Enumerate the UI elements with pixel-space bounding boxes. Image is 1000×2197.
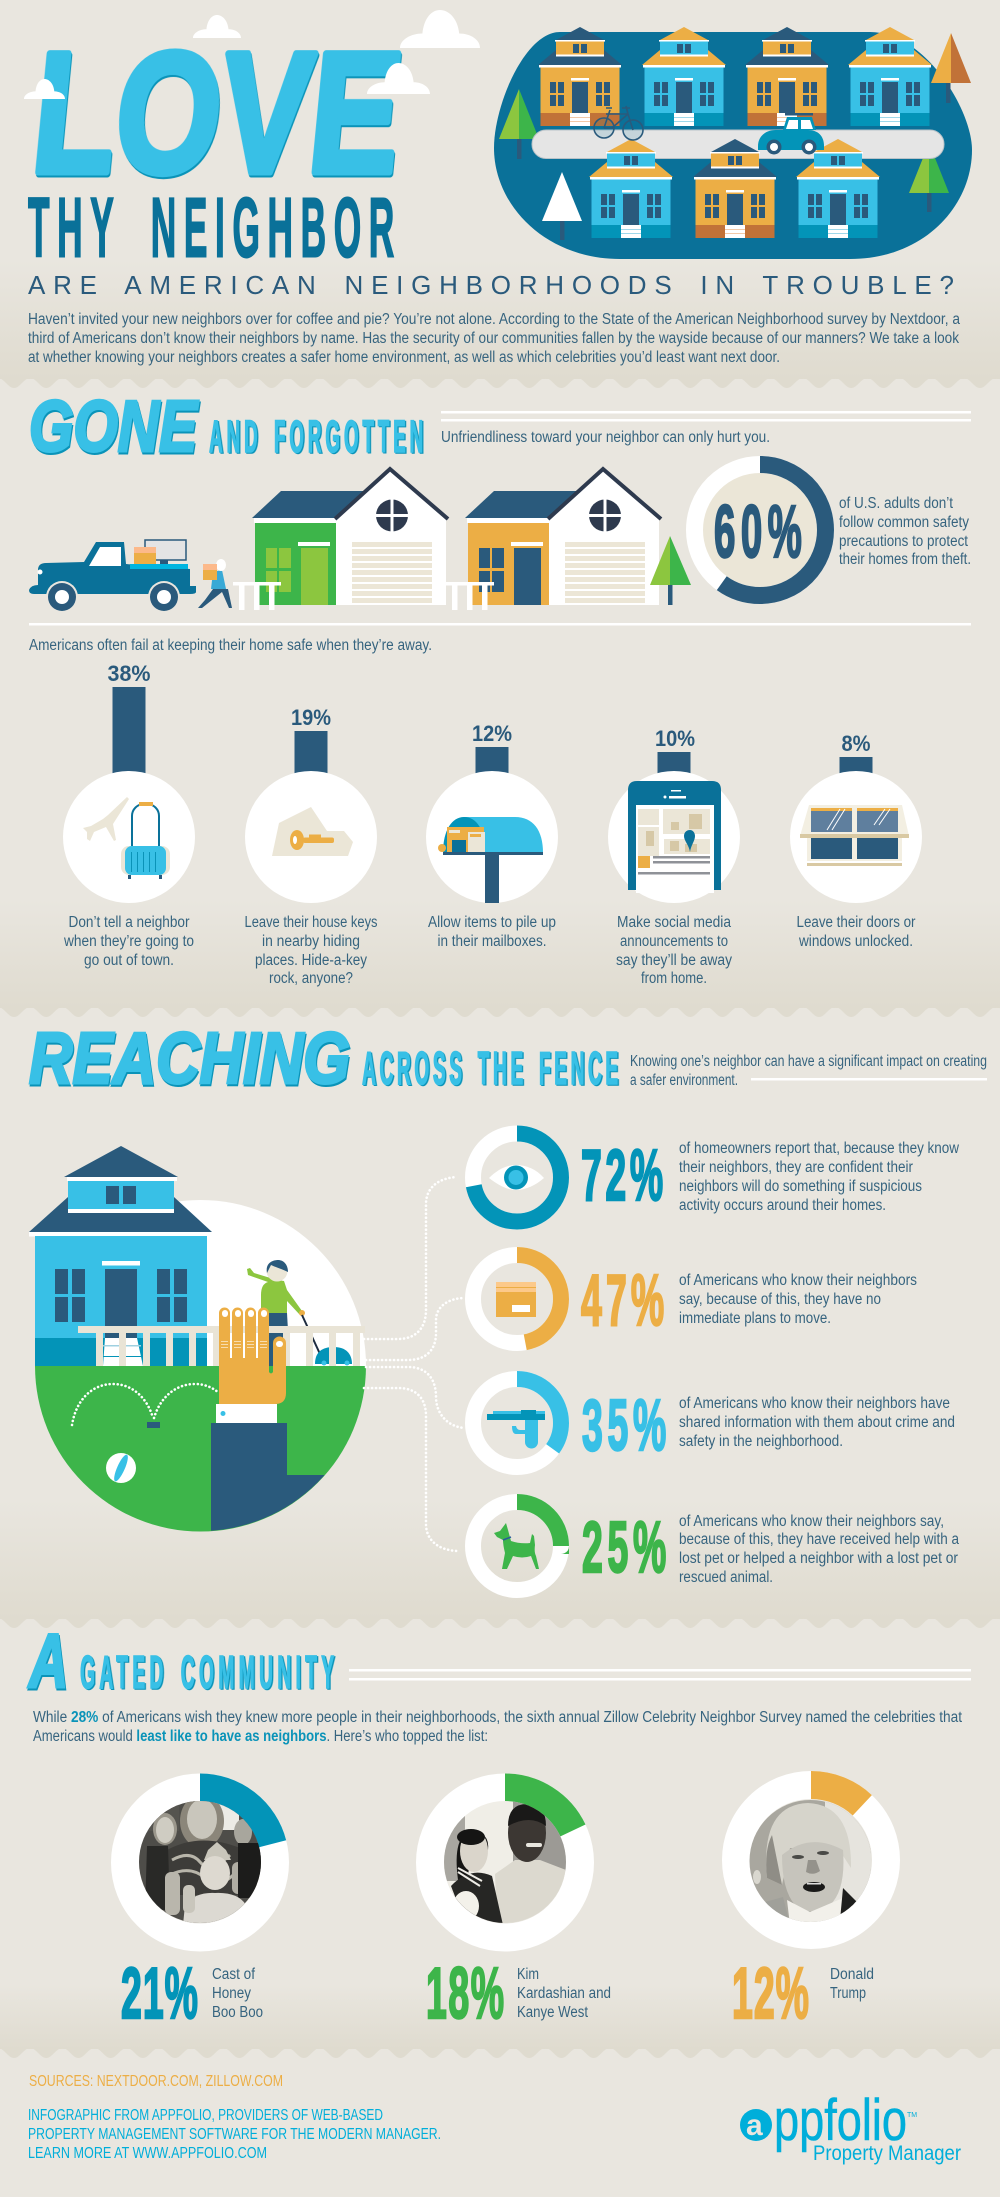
caption: when they’re going to (63, 933, 194, 950)
credits: LEARN MORE AT WWW.APPFOLIO.COM (28, 2145, 267, 2162)
intro text: at whether knowing your neighbors creates a safer home environment, as well as which celebrities you’d least want next door. (28, 349, 780, 366)
column: 10% (608, 726, 740, 987)
stat: 25%: because of this, they have received help with a (679, 1531, 959, 1548)
sources: SOURCES: NEXTDOOR.COM, ZILLOW.COM (29, 2073, 283, 2090)
column: 8% (790, 731, 922, 950)
caption (796, 914, 916, 950)
icon: window (800, 805, 909, 866)
sprinkler (72, 1384, 219, 1428)
logo: appfolio: ppfolio (774, 2088, 907, 2153)
column: 12% (426, 721, 558, 950)
stat: 47%: 47% (581, 1261, 664, 1341)
stat: 47%: immediate plans to move. (679, 1310, 831, 1327)
caption (244, 914, 378, 987)
celebrity: kim and kanye: 18% (426, 1954, 504, 2034)
donut chart: 60%: 60% (714, 492, 802, 573)
stat: 25%: rescued animal. (679, 1569, 773, 1586)
credits: INFOGRAPHIC FROM APPFOLIO, PROVIDERS OF WEB-BASED (28, 2107, 383, 2124)
caption (616, 914, 732, 987)
stat: 72%: activity occurs around their homes. (679, 1197, 886, 1214)
panel: gone and forgotten (29, 387, 971, 987)
caption: in nearby hiding (262, 933, 360, 950)
column: 10%: 10% (655, 726, 695, 751)
icon: dog (494, 1523, 539, 1569)
icon: eye (489, 1165, 544, 1190)
stat: 72%: of homeowners report that, because they know (679, 1140, 960, 1157)
photo placeholder (139, 1794, 262, 1925)
icon: person carrying box (198, 559, 232, 608)
column: 19% (244, 705, 378, 987)
heading: REACHING (29, 1019, 350, 1099)
logo: appfolio (740, 2088, 961, 2165)
icon: rock with key (272, 807, 353, 856)
stat: 35%: shared information with them about crime and (679, 1414, 955, 1431)
neighborhood illustration (494, 27, 972, 259)
heading: GATED COMMUNITY (80, 1648, 334, 1698)
panel: a gated community (28, 1619, 971, 2034)
celebrity: donald trump: Trump (830, 1985, 866, 2002)
column: 12%: 12% (472, 721, 512, 746)
neighbor mowing lawn (247, 1260, 352, 1366)
stat: 35%: of Americans who know their neighbors have (679, 1395, 950, 1412)
panel: header (24, 10, 972, 366)
caption (63, 914, 194, 969)
icon: box (496, 1282, 536, 1317)
stat: 72%: their neighbors, they are confident their (679, 1159, 913, 1176)
icon: plane and luggage (83, 797, 170, 879)
title: Love: LOVE (25, 16, 410, 209)
caption: Allow items to pile up (428, 914, 556, 931)
caption: Don’t tell a neighbor (68, 914, 190, 931)
caption: Make social media (617, 914, 731, 931)
stat: 72%: 72% (581, 1136, 663, 1216)
subheading text: Unfriendliness toward your neighbor can only hurt you. (441, 429, 770, 446)
intro text (33, 1709, 963, 1745)
road (532, 130, 944, 158)
hand (216, 1308, 286, 1423)
stat: 47%: of Americans who know their neighbors (679, 1272, 917, 1289)
subheading text: a safer environment. (630, 1072, 738, 1089)
celebrity: honey boo boo: 21% (121, 1954, 198, 2034)
icon: trees (499, 33, 971, 240)
caption: in their mailboxes. (438, 933, 546, 950)
icon: water gun (487, 1410, 545, 1448)
celebrity: honey boo boo: Boo Boo (212, 2004, 263, 2021)
caption: from home. (641, 970, 707, 987)
subheading text (630, 1053, 987, 1089)
icon: pickup truck (29, 540, 196, 613)
stat: 25%: 25% (582, 1508, 666, 1588)
caption: go out of town. (84, 952, 174, 969)
60% description: precautions to protect (839, 533, 969, 550)
caption: say they’ll be away (616, 952, 732, 969)
stat: 47% (473, 1255, 917, 1343)
donut chart: 60% (694, 464, 826, 596)
heading (29, 387, 423, 467)
logo: appfolio: a (746, 2109, 763, 2142)
dotted connectors (364, 1177, 465, 1551)
stat: 25% (473, 1502, 959, 1590)
icon: mailbox (438, 817, 543, 903)
icon: tree (650, 536, 691, 605)
stat: 72% (473, 1134, 960, 1222)
title: thy neighbor: THY NEIGHBOR (28, 181, 394, 275)
heading: AND FORGOTTEN (209, 413, 423, 462)
stat: 25%: lost pet or helped a neighbor with a lost pet or (679, 1550, 958, 1567)
stat: 47%: say, because of this, they have no (679, 1291, 881, 1308)
column: 38%: 38% (108, 661, 150, 686)
stat: 35%: 35% (582, 1386, 666, 1466)
celebrity: honey boo boo (121, 1788, 275, 2034)
photo placeholder (749, 1800, 872, 1925)
caption: Leave their house keys (244, 914, 378, 931)
celebrity: donald trump: Donald (830, 1966, 874, 1983)
heading (28, 1619, 334, 1704)
icon: bicycle (594, 106, 643, 140)
panel: reaching across the fence (29, 1019, 987, 1590)
sleeve (211, 1423, 324, 1531)
heading: ACROSS THE FENCE (362, 1044, 618, 1094)
60% description (839, 495, 971, 568)
stat: 72%: neighbors will do something if suspicious (679, 1178, 922, 1195)
celebrity: kim and kanye (426, 1788, 611, 2034)
house: green (233, 469, 448, 610)
caption: windows unlocked. (798, 933, 913, 950)
stat: 25%: of Americans who know their neighbors say, (679, 1513, 944, 1530)
intro text (28, 311, 960, 366)
heading: GONE (29, 387, 199, 467)
celebrity: kim and kanye: Kanye West (517, 2004, 589, 2021)
60% description: follow common safety (839, 514, 969, 531)
caption: rock, anyone? (269, 970, 353, 987)
celebrity: kim and kanye: Kardashian and (517, 1985, 611, 2002)
celebrity: kim and kanye: Kim (517, 1966, 539, 1983)
heading (29, 1019, 618, 1099)
footer (28, 2073, 961, 2165)
houses top row (538, 27, 932, 126)
text: intro to bars: Americans often fail at keeping their home safe when they’re away. (29, 637, 432, 654)
60% description: of U.S. adults don’t (839, 495, 954, 512)
houses bottom row (589, 139, 880, 238)
column: 38% (63, 661, 195, 969)
intro text: Americans would least like to have as neighbors. Here’s who topped the list: (33, 1728, 488, 1745)
column: 8%: 8% (842, 731, 870, 756)
caption (428, 914, 556, 950)
logo: appfolio: Property Manager (813, 2142, 961, 2165)
icon: phone with map (628, 781, 721, 893)
celebrity: honey boo boo: Cast of (212, 1966, 256, 1983)
icon: ball (106, 1453, 136, 1483)
column: 19%: 19% (291, 705, 331, 730)
60% description: their homes from theft. (839, 551, 971, 568)
credits (28, 2107, 441, 2162)
icon: car (758, 113, 824, 154)
celebrity: donald trump: 12% (732, 1954, 809, 2034)
house (29, 1146, 212, 1366)
celebrity: donald trump (732, 1785, 886, 2034)
caption: places. Hide-a-key (255, 952, 367, 969)
house: orange (446, 469, 661, 610)
caption: announcements to (620, 933, 728, 950)
stat: 35% (473, 1379, 955, 1467)
credits: PROPERTY MANAGEMENT SOFTWARE FOR THE MODERN MANAGER. (28, 2126, 441, 2143)
caption: Leave their doors or (796, 914, 916, 931)
logo: appfolio: TM (907, 2112, 917, 2119)
stat: 35%: safety in the neighborhood. (679, 1433, 843, 1450)
illustration: house and waving hand (29, 1146, 366, 1532)
subtitle: ARE AMERICAN NEIGHBORHOODS IN TROUBLE? (28, 270, 954, 300)
photo placeholder (444, 1801, 567, 1925)
icon: clouds (24, 10, 480, 99)
celebrity: honey boo boo: Honey (212, 1985, 251, 2002)
fence (78, 1326, 365, 1366)
heading: A (28, 1619, 68, 1704)
